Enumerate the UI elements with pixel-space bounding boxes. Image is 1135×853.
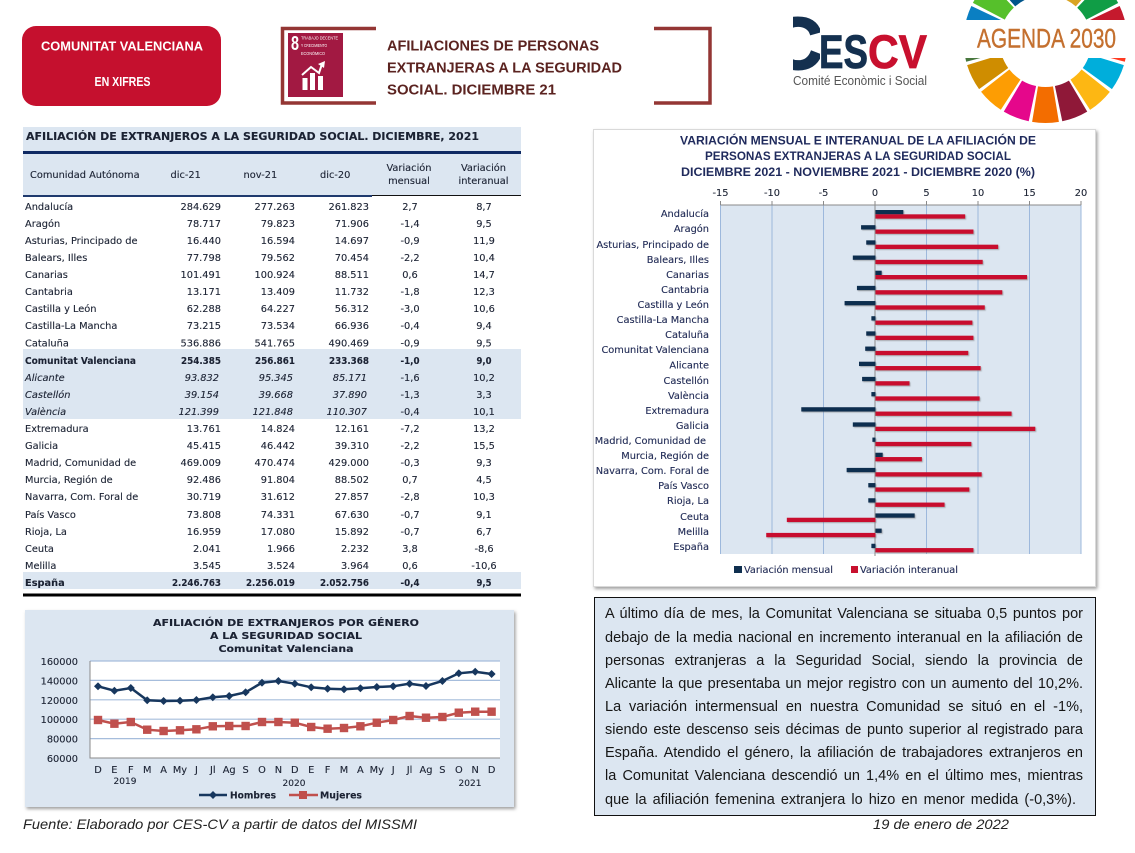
table rows: 3,8 xyxy=(402,544,418,555)
table rows: 62.288 xyxy=(187,304,221,315)
x axis labels: Ag xyxy=(223,765,236,776)
x axis labels: D xyxy=(291,765,299,776)
table rows: 39.154 xyxy=(185,390,219,401)
category labels: Ceuta xyxy=(680,512,709,523)
category labels: País Vasco xyxy=(658,480,709,492)
table rows: -0,4 xyxy=(400,407,420,418)
x axis labels: 5 xyxy=(923,188,930,199)
table rows: Murcia, Región de xyxy=(25,474,113,486)
table rows: -0,4 xyxy=(400,321,420,332)
table rows: 64.227 xyxy=(261,304,295,315)
table rows: 71.906 xyxy=(335,219,369,230)
table rows: Aragón xyxy=(25,218,60,230)
chart title: AFILIACIÓN DE EXTRANJEROS POR GÉNERO xyxy=(153,616,419,629)
y axis labels: 140000 xyxy=(41,676,78,688)
icon: SDG 8 decent work and economic growth: 8 xyxy=(291,33,299,55)
x axis labels: O xyxy=(258,765,266,776)
category labels: Navarra, Com. Foral de xyxy=(596,466,709,477)
logo: CES CV Comité Econòmic i Social: ES xyxy=(819,25,868,78)
table rows: 12.161 xyxy=(335,424,369,435)
table rows: 17.080 xyxy=(261,527,295,538)
x axis labels: A xyxy=(357,765,364,776)
bar chart panel: variación mensual e interanual xyxy=(594,130,1096,586)
table rows: 93.832 xyxy=(185,373,219,384)
table rows: Ceuta xyxy=(25,544,54,555)
table rows: 45.415 xyxy=(187,441,221,452)
table rows: 77.798 xyxy=(187,253,221,264)
category labels: Asturias, Principado de xyxy=(596,240,709,251)
icon: SDG 8 decent work and economic growth xyxy=(288,33,343,97)
x axis labels: D xyxy=(94,765,102,776)
table rows: 15.892 xyxy=(335,527,369,538)
source note: Fuente: Elaborado por CES-CV a partir de datos del MISSMI xyxy=(23,816,417,832)
heading frame with SDG 8 icon and title xyxy=(282,28,710,103)
category labels: Cataluña xyxy=(665,330,709,341)
x axis labels: My xyxy=(370,765,384,776)
table rows: 0,6 xyxy=(402,561,418,572)
table rows: -1,6 xyxy=(400,373,420,384)
x axis labels: E xyxy=(308,765,314,776)
table rows: 0,6 xyxy=(402,270,418,281)
icon: SDG 8 decent work and economic growth: TRABAJO DECENTE xyxy=(301,36,338,40)
table rows: -10,6 xyxy=(471,561,497,572)
table rows: 110.307 xyxy=(326,407,368,418)
table rows: -1,3 xyxy=(400,390,420,401)
table rows: 10,3 xyxy=(473,492,495,503)
table rows: País Vasco xyxy=(25,509,76,521)
text panel: commentary: La variación intermensual en nuestra Comunidad se situó en el -1%, xyxy=(605,698,1083,714)
category labels: Murcia, Región de xyxy=(621,450,709,462)
text panel: commentary: la Comunitat Valenciana descendió un 1,4% en el último mes, mientras xyxy=(605,768,1083,784)
table rows: 3.964 xyxy=(341,561,369,572)
table rows: 3.545 xyxy=(193,561,221,572)
table rows: 67.630 xyxy=(335,510,369,521)
table rows: 9,5 xyxy=(476,578,492,589)
table header row: Variación xyxy=(461,162,506,174)
highlight bands: Comunitat Valenciana and España xyxy=(23,349,521,596)
table rows: 4,5 xyxy=(476,475,492,486)
table rows: Alicante xyxy=(24,373,65,384)
table rows: 284.629 xyxy=(180,202,221,213)
table rows: 14,7 xyxy=(473,270,495,281)
chart title xyxy=(680,132,1036,179)
x axis labels: -5 xyxy=(819,188,828,199)
table rows: 37.890 xyxy=(333,390,367,401)
chart title xyxy=(153,616,419,655)
table rows: 73.534 xyxy=(261,321,295,332)
table rows: Rioja, La xyxy=(25,527,67,538)
table header row: Comunidad Autónoma xyxy=(30,169,140,181)
table rows: 2.052.756 xyxy=(320,578,369,589)
x axis labels: 0 xyxy=(872,188,878,199)
table rows: 9,3 xyxy=(476,458,492,469)
table rows: -1,4 xyxy=(400,219,420,230)
table rows: 429.000 xyxy=(328,458,369,469)
table rows: Extremadura xyxy=(25,424,89,435)
table rows: -3,0 xyxy=(400,304,420,315)
bars: variación interanual xyxy=(766,214,1035,552)
x axis labels: Jl xyxy=(406,765,412,776)
table rows: 70.454 xyxy=(335,253,369,264)
table header row: dic-20 xyxy=(320,170,350,181)
table rows: -0,9 xyxy=(400,236,420,247)
table rows: 2,7 xyxy=(402,202,418,213)
table rows: Castilla-La Mancha xyxy=(25,321,117,332)
x axis labels: S xyxy=(242,765,249,776)
table rows: 39.310 xyxy=(335,441,369,452)
y axis labels: 60000 xyxy=(47,754,78,765)
table rows: Balears, Illes xyxy=(25,253,87,264)
table rows: 101.491 xyxy=(180,270,221,281)
x axis labels: 2021 xyxy=(459,779,481,789)
table rows: 9,0 xyxy=(476,356,492,367)
chart title: PERSONAS EXTRANJERAS A LA SEGURIDAD SOCIAL xyxy=(705,149,1011,163)
category labels: Melilla xyxy=(678,527,709,538)
table rows xyxy=(24,201,497,589)
table rows: 9,4 xyxy=(476,321,492,332)
y axis labels xyxy=(41,657,78,765)
table rows: 27.857 xyxy=(335,492,369,503)
x axis labels: Jl xyxy=(209,765,216,776)
table rows: Cantabria xyxy=(25,287,73,298)
table rows: 16.440 xyxy=(187,236,221,247)
category labels: Cantabria xyxy=(661,285,709,296)
category labels: Canarias xyxy=(666,270,709,281)
y axis labels: 120000 xyxy=(41,696,78,707)
table rows: 10,4 xyxy=(473,253,495,264)
date: 19 de enero de 2022 xyxy=(873,816,1009,832)
x axis labels: My xyxy=(173,765,187,776)
table header row: mensual xyxy=(388,176,430,187)
table rows: 277.263 xyxy=(254,202,295,213)
table rows: -1,0 xyxy=(400,356,420,367)
text panel: commentary: Alicante la que presentaba un mejor registro con un aumento del 10,2%. xyxy=(605,676,1083,692)
table rows: -8,6 xyxy=(474,544,494,555)
table rows: 95.345 xyxy=(259,373,293,384)
category labels: Castilla y León xyxy=(637,299,709,311)
badge: Comunitat Valenciana en xifres: EN XIFRES xyxy=(94,75,150,89)
line chart panel: afiliación por género xyxy=(25,610,514,807)
table rows: -2,2 xyxy=(400,253,420,264)
table rows: 9,1 xyxy=(476,510,492,521)
text panel: commentary: debajo de la media nacional en incremento interanual en la afiliación de xyxy=(605,630,1083,646)
title: AFILIACIONES DE PERSONAS xyxy=(387,38,599,54)
chart title: VARIACIÓN MENSUAL E INTERANUAL DE LA AFILIACIÓN DE xyxy=(680,132,1036,148)
x axis labels: -10 xyxy=(764,188,780,199)
table rows: 2.232 xyxy=(341,544,369,555)
x axis labels: 15 xyxy=(1023,188,1036,199)
category labels: Comunitat Valenciana xyxy=(601,345,709,356)
table rows: -0,9 xyxy=(400,338,420,350)
text panel: commentary: que la afiliación femenina extranjera lo hizo en menor medida (-0,3%). xyxy=(605,792,1076,808)
text panel: commentary: España. Atendido el género, la afiliación de trabajadores extranjeros en xyxy=(605,745,1083,761)
table rows: -0,7 xyxy=(400,527,420,538)
table rows: -2,8 xyxy=(400,492,420,503)
table rows: Cataluña xyxy=(25,338,69,350)
table rows: -2,2 xyxy=(400,441,420,452)
table rows: 88.511 xyxy=(335,270,369,281)
legend: Mujeres xyxy=(320,790,362,802)
table rows: 6,7 xyxy=(476,527,492,538)
category labels: Galicia xyxy=(676,421,709,432)
chart title: DICIEMBRE 2021 - NOVIEMBRE 2021 - DICIEMBRE 2020 (%) xyxy=(681,165,1035,179)
table header row: dic-21 xyxy=(170,170,201,181)
table header row xyxy=(23,154,521,197)
table rows: 31.612 xyxy=(261,492,295,503)
text panel: commentary: siendo este descenso seis décimas de punto superior al registrado para xyxy=(605,722,1083,738)
legend: Hombres xyxy=(230,790,276,802)
logo: CES CV Comité Econòmic i Social xyxy=(793,16,928,85)
x axis labels: S xyxy=(439,765,446,776)
category labels: Extremadura xyxy=(645,406,709,417)
x axis labels: J xyxy=(391,765,395,776)
table rows: 121.399 xyxy=(178,407,219,418)
title: EXTRANJERAS A LA SEGURIDAD xyxy=(387,60,622,76)
plot area xyxy=(90,661,500,758)
table rows: 14.824 xyxy=(261,424,295,435)
x axis labels: N xyxy=(472,765,479,776)
x axis labels: -15 xyxy=(712,188,729,199)
category labels: Castellón xyxy=(664,375,709,387)
table rows: 121.848 xyxy=(252,407,293,418)
table rows: 10,6 xyxy=(473,304,495,315)
table rows: Canarias xyxy=(25,270,68,281)
y axis labels: 160000 xyxy=(41,657,78,668)
table rows: 10,2 xyxy=(473,373,495,384)
table rows: 91.804 xyxy=(261,475,295,486)
logo: CES CV Comité Econòmic i Social: Comité Econòmic i Social xyxy=(793,73,927,88)
x axis labels: F xyxy=(325,765,331,776)
table rows: 9,5 xyxy=(476,219,492,230)
table rows: 9,5 xyxy=(476,338,492,350)
table rows: 79.823 xyxy=(261,219,295,230)
table rows: 88.502 xyxy=(335,475,369,486)
category labels: España xyxy=(673,542,709,553)
text panel: commentary: A último día de mes, la Comunitat Valenciana se situaba 0,5 puntos por xyxy=(605,606,1083,622)
table rows: 100.924 xyxy=(254,270,295,281)
x axis labels: 10 xyxy=(972,188,984,199)
table rows: 3.524 xyxy=(267,561,295,572)
legend xyxy=(734,564,958,576)
table rows: València xyxy=(25,406,66,418)
table rows: 39.668 xyxy=(259,390,293,401)
category labels: València xyxy=(668,390,709,402)
table rows: 16.959 xyxy=(187,527,221,538)
bars: variación mensual xyxy=(801,210,915,548)
category labels: Aragón xyxy=(674,223,709,235)
category labels: Andalucía xyxy=(661,208,709,220)
table rows: 46.442 xyxy=(261,441,295,452)
table rows: 541.765 xyxy=(254,338,295,350)
table rows: 8,7 xyxy=(476,202,492,213)
x axis labels: N xyxy=(275,765,282,776)
table rows: 30.719 xyxy=(187,492,221,503)
table rows: 3,3 xyxy=(476,390,492,401)
legend xyxy=(199,790,362,802)
logo: CES CV Comité Econòmic i Social: C xyxy=(770,4,823,85)
table rows: 74.331 xyxy=(261,510,295,521)
y axis labels: 100000 xyxy=(41,715,78,726)
legend: Variación mensual xyxy=(744,564,833,576)
table rows: 261.823 xyxy=(328,202,369,213)
table header row: interanual xyxy=(459,176,508,187)
table rows: 256.861 xyxy=(255,356,295,367)
table rows: 79.562 xyxy=(261,253,295,264)
category labels: Alicante xyxy=(669,360,709,372)
table rows: 13.171 xyxy=(187,287,221,298)
table rows: -1,8 xyxy=(400,287,420,298)
x axis labels: 20 xyxy=(1075,188,1087,199)
table: afiliación de extranjeros por comunidad autónoma xyxy=(23,127,521,596)
table rows: Madrid, Comunidad de xyxy=(25,458,136,469)
series: Hombres xyxy=(98,672,492,701)
table rows: 233.368 xyxy=(329,356,369,367)
icon: SDG 8 decent work and economic growth: Y CRECIMIENTO xyxy=(301,43,327,48)
table rows: Galicia xyxy=(25,441,58,452)
table rows: -0,3 xyxy=(400,458,420,469)
chart title: Comunitat Valenciana xyxy=(218,644,354,655)
badge: Comunitat Valenciana en xifres xyxy=(22,26,221,106)
category labels: Madrid, Comunidad de xyxy=(595,436,706,447)
table rows: Castilla y León xyxy=(25,303,97,315)
table rows: 73.808 xyxy=(187,510,221,521)
text panel: commentary xyxy=(594,597,1096,816)
x axis labels: D xyxy=(488,765,495,776)
table header row: nov-21 xyxy=(244,170,277,181)
table rows: Asturias, Principado de xyxy=(25,236,138,247)
title xyxy=(387,38,622,98)
x axis labels: J xyxy=(194,765,198,776)
category labels: Balears, Illes xyxy=(647,255,709,266)
title: SOCIAL. DICIEMBRE 21 xyxy=(387,82,556,98)
table rows: 11.732 xyxy=(335,287,369,298)
table rows: 73.215 xyxy=(187,321,221,332)
table rows: 78.717 xyxy=(187,219,221,230)
table rows: 11,9 xyxy=(473,236,495,247)
logo: Agenda 2030 SDG wheel xyxy=(955,0,1135,131)
y axis labels: 80000 xyxy=(47,734,78,746)
icon: SDG 8 decent work and economic growth: ECONÓMICO xyxy=(301,50,325,56)
table rows: 10,1 xyxy=(473,407,495,418)
category labels: Castilla-La Mancha xyxy=(617,315,709,326)
table rows: 16.594 xyxy=(261,236,295,247)
table rows: 2.246.763 xyxy=(172,578,221,589)
table rows: 56.312 xyxy=(335,304,369,315)
table rows: 13.409 xyxy=(261,287,295,298)
table rows: 66.936 xyxy=(335,321,369,332)
table rows: 254.385 xyxy=(181,356,221,367)
table title band xyxy=(23,127,521,154)
x axis labels: A xyxy=(160,765,167,776)
table rows: 470.474 xyxy=(254,458,295,469)
table rows: 12,3 xyxy=(473,287,495,298)
table rows: -0,7 xyxy=(400,510,420,521)
text panel: commentary: personas extranjeras a la Seguridad Social, siendo la provincia de xyxy=(605,652,1083,668)
x axis labels: 2020 xyxy=(283,779,306,789)
table rows: 469.009 xyxy=(180,458,221,469)
table title band: AFILIACIÓN DE EXTRANJEROS A LA SEGURIDAD SOCIAL. DICIEMBRE, 2021 xyxy=(26,130,479,143)
x axis labels: E xyxy=(111,765,118,776)
table rows: España xyxy=(25,578,65,589)
x axis labels xyxy=(712,188,1087,199)
plot background and grid xyxy=(720,201,1081,556)
table rows: 13.761 xyxy=(187,424,221,435)
table rows: 92.486 xyxy=(187,475,221,486)
category labels xyxy=(595,208,709,553)
table rows: 85.171 xyxy=(333,373,367,384)
table rows: 14.697 xyxy=(335,236,369,247)
table rows: Comunitat Valenciana xyxy=(25,356,136,367)
x axis labels xyxy=(94,765,495,789)
table rows: 13,2 xyxy=(473,424,495,435)
x axis labels: M xyxy=(143,765,151,776)
legend: Variación interanual xyxy=(860,564,958,576)
table rows: -7,2 xyxy=(400,424,420,435)
chart title: A LA SEGURIDAD SOCIAL xyxy=(210,631,363,642)
table rows: 2.256.019 xyxy=(246,578,295,589)
table rows: 15,5 xyxy=(473,441,495,452)
table rows: -0,4 xyxy=(400,578,420,589)
x axis labels: M xyxy=(340,765,348,776)
table rows: 2.041 xyxy=(193,544,221,555)
x axis labels: Ag xyxy=(420,765,432,776)
logo: CES CV Comité Econòmic i Social: CV xyxy=(868,25,928,78)
table header row: Variación xyxy=(386,162,432,174)
table rows: 0,7 xyxy=(402,475,418,486)
x axis labels: O xyxy=(455,765,463,776)
table rows: Navarra, Com. Foral de xyxy=(25,492,138,503)
table rows: Andalucía xyxy=(25,201,73,213)
x axis labels: 2019 xyxy=(114,777,137,787)
table rows: Melilla xyxy=(25,561,56,572)
series: Mujeres xyxy=(98,712,492,731)
x axis labels: F xyxy=(128,765,134,776)
table rows: 1.966 xyxy=(267,544,295,555)
badge: Comunitat Valenciana en xifres: COMUNITAT VALENCIANA xyxy=(41,40,203,54)
table rows: Castellón xyxy=(25,389,70,401)
table rows: 536.886 xyxy=(180,338,221,350)
category labels: Rioja, La xyxy=(667,496,709,507)
table rows: 490.469 xyxy=(328,338,369,350)
